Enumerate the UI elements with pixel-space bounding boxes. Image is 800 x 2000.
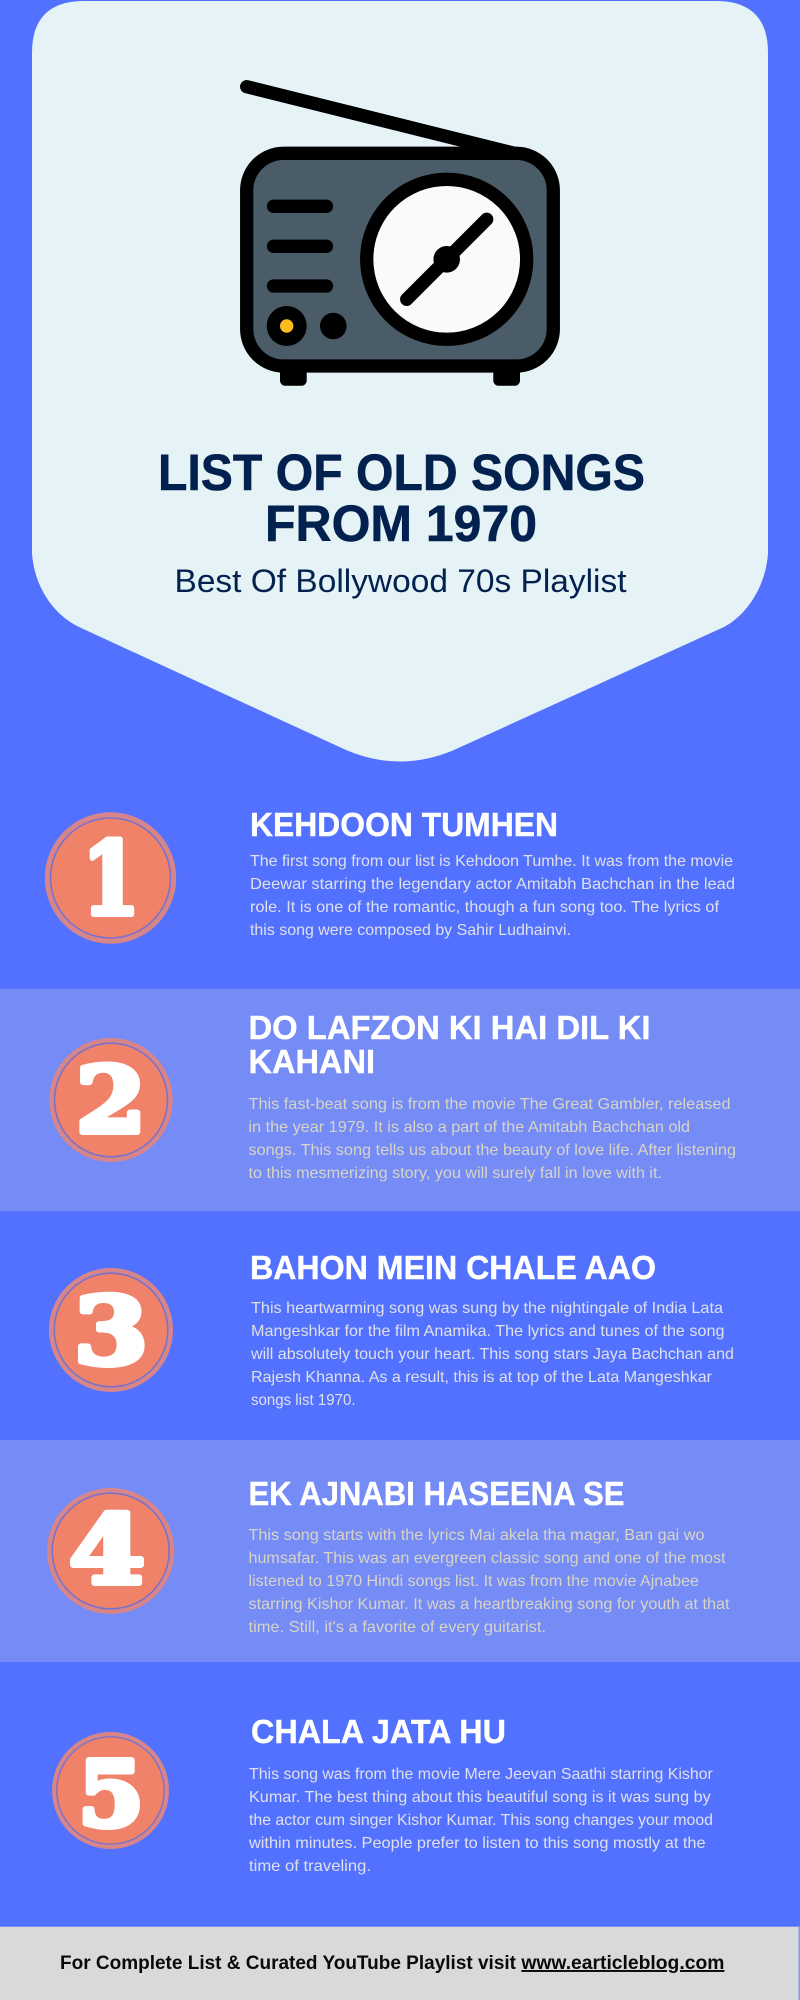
number badge 3 [49, 1268, 173, 1392]
radio body [247, 153, 553, 366]
panel: song 3 [49, 1249, 734, 1409]
title: FROM 1970 [265, 495, 537, 552]
panel: footer bar [0, 1926, 800, 2000]
title [158, 444, 645, 552]
description: This song starts with the lyrics Mai akela tha magar, Ban gai wo [248, 1527, 705, 1544]
heading: EK AJNABI HASEENA SE [248, 1475, 624, 1512]
heading: BAHON MEIN CHALE AAO [250, 1249, 656, 1286]
description: this song were composed by Sahir Ludhainvi. [250, 922, 571, 939]
description: songs list 1970. [251, 1392, 356, 1409]
description: Rajesh Khanna. As a result, this is at top of the Lata Mangeshkar [251, 1369, 713, 1386]
description: to this mesmerizing story, you will surely fall in love with it. [248, 1165, 662, 1182]
subtitle: Best Of Bollywood 70s Playlist [174, 563, 627, 599]
panel: song 4 [47, 1475, 730, 1636]
panel: song 1 [45, 806, 735, 944]
description: listened to 1970 Hindi songs list. It was from the movie Ajnabee [248, 1573, 699, 1590]
band: section 2 background [0, 989, 800, 1211]
footer call to action: www.earticleblog.com [520, 1952, 724, 1974]
description: within minutes. People prefer to listen to this song mostly at the [248, 1835, 706, 1852]
description: the actor cum singer Kishor Kumar. This song changes your mood [249, 1812, 713, 1829]
panel: song 2 [49, 1009, 736, 1182]
description: songs. This song tells us about the beauty of love life. After listening [248, 1142, 736, 1159]
number badge 5: 5 [78, 1742, 144, 1848]
description [248, 1096, 736, 1182]
description: Mangeshkar for the film Anamika. The lyrics and tunes of the song [251, 1323, 724, 1340]
number badge 1 [45, 812, 176, 944]
number badge 4: 4 [69, 1495, 145, 1606]
heading: CHALA JATA HU [251, 1713, 506, 1750]
description: The first song from our list is Kehdoon Tumhe. It was from the movie [250, 853, 733, 870]
band: section 4 background [0, 1440, 800, 1662]
description: This song was from the movie Mere Jeevan Saathi starring Kishor [249, 1766, 713, 1783]
description: in the year 1979. It is also a part of the Amitabh Bachchan old [248, 1119, 690, 1136]
description: starring Kishor Kumar. It was a heartbreaking song for youth at that [248, 1596, 730, 1613]
panel: song 5 [52, 1713, 713, 1875]
number badge 1: 1 [82, 820, 140, 938]
description: This fast-beat song is from the movie The Great Gambler, released [248, 1096, 730, 1113]
number badge 2: 2 [76, 1048, 146, 1154]
description: will absolutely touch your heart. This song stars Jaya Bachchan and [250, 1346, 734, 1363]
number badge 5 [52, 1732, 169, 1849]
description: humsafar. This was an evergreen classic song and one of the most [248, 1550, 726, 1567]
number badge 4 [47, 1488, 174, 1614]
antenna [247, 87, 525, 156]
icon: radio [247, 87, 553, 386]
panel: hero header shield [32, 1, 768, 762]
description [248, 1527, 730, 1636]
speaker lines [274, 206, 326, 286]
description: time. Still, it's a favorite of every guitarist. [248, 1619, 546, 1636]
description: role. It is one of the romantic, though a fun song too. The lyrics of [250, 899, 720, 916]
small knob [320, 313, 347, 339]
heading [248, 1009, 650, 1080]
description: time of traveling. [249, 1858, 371, 1875]
description: This heartwarming song was sung by the nightingale of India Lata [251, 1300, 723, 1317]
description: Deewar starring the legendary actor Amitabh Bachchan in the lead [250, 876, 735, 893]
title: LIST OF OLD SONGS [158, 444, 645, 501]
number badge 2 [49, 1038, 173, 1162]
number badge 3: 3 [74, 1276, 148, 1386]
volume knob [267, 306, 307, 346]
heading: DO LAFZON KI HAI DIL KI [248, 1009, 650, 1046]
heading: KEHDOON TUMHEN [250, 806, 558, 843]
heading: KAHANI [248, 1043, 375, 1080]
description: Kumar. The best thing about this beautiful song is it was sung by [249, 1789, 711, 1806]
description [250, 853, 735, 939]
description [250, 1300, 734, 1409]
radio feet [280, 360, 520, 386]
tuning dial [367, 179, 527, 339]
footer call to action: For Complete List & Curated YouTube Playlist visit [60, 1952, 516, 1974]
description [248, 1766, 713, 1875]
